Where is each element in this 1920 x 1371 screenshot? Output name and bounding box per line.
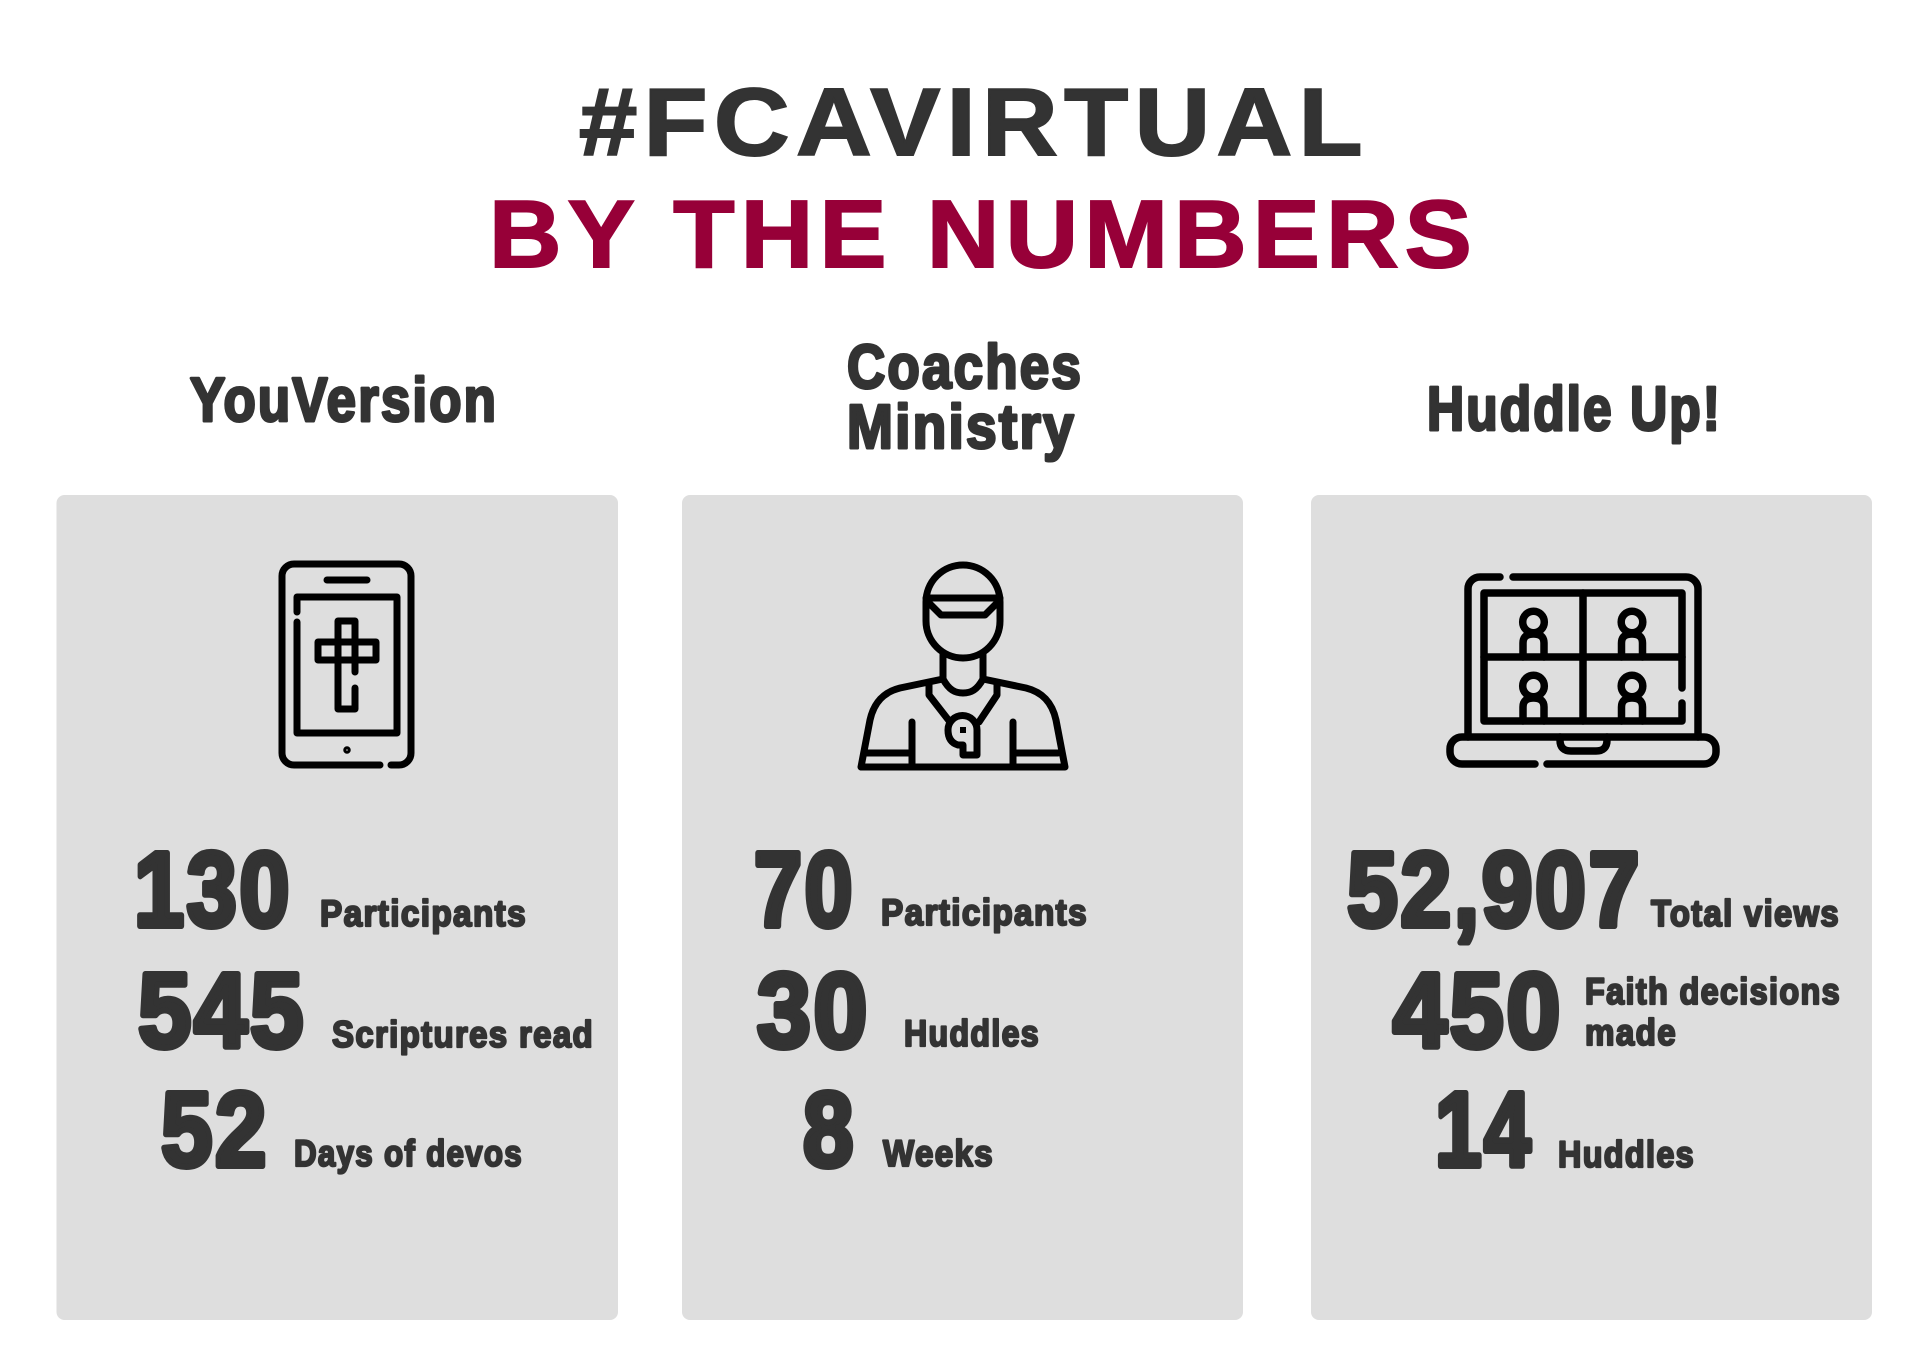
stat: 70 participants — [754, 831, 1088, 949]
stat: 52,907 total views: 52,907 — [1347, 831, 1642, 949]
stat: 30 huddles — [757, 952, 1040, 1070]
stat: 545 scriptures read: 545 — [138, 952, 306, 1070]
panel: Huddle Up — [1311, 375, 1872, 1320]
stat: 14 huddles: Huddles — [1558, 1134, 1695, 1175]
stat: 30 huddles: 30 — [757, 952, 870, 1070]
heading: Huddle Up!: Huddle Up! — [1427, 375, 1722, 444]
panel: Coaches Ministry — [682, 333, 1243, 1320]
stat: 545 scriptures read: Scriptures read — [332, 1014, 594, 1055]
icon: coach with whistle — [861, 565, 1065, 767]
stat: 30 huddles: Huddles — [904, 1013, 1040, 1054]
stat: 52,907 total views — [1347, 831, 1840, 949]
stat: 8 weeks: Weeks — [883, 1133, 994, 1174]
title — [489, 69, 1478, 288]
stat: 130 participants — [134, 831, 527, 949]
stat: 450 faith decisions made: made — [1585, 1012, 1677, 1053]
stat: 52 days of devos: Days of devos — [294, 1133, 523, 1174]
heading: Coaches Ministry: Coaches — [847, 333, 1083, 402]
card background — [56, 495, 618, 1320]
stat: 70 participants: Participants — [881, 892, 1088, 933]
stat: 14 huddles — [1435, 1071, 1695, 1189]
stat: 450 faith decisions made: Faith decisions — [1585, 971, 1841, 1012]
title line 2: BY THE NUMBERS — [489, 181, 1478, 288]
stat: 545 scriptures read — [138, 952, 594, 1070]
stat: 450 faith decisions made: 450 — [1393, 952, 1563, 1070]
icon: laptop video call — [1450, 577, 1716, 764]
stat: 70 participants: 70 — [754, 831, 855, 949]
heading: YouVersion: YouVersion — [190, 366, 498, 435]
panel: YouVersion — [56, 366, 618, 1320]
card background — [1311, 495, 1872, 1320]
stat: 130 participants: 130 — [134, 831, 292, 949]
icon: tablet with cross — [282, 564, 411, 765]
stat: 14 huddles: 14 — [1435, 1071, 1533, 1189]
stat: 8 weeks — [803, 1071, 994, 1189]
title line 1: #FCAVIRTUAL — [579, 69, 1369, 176]
stat: 52 days of devos: 52 — [161, 1071, 269, 1189]
stat: 52 days of devos — [161, 1071, 523, 1189]
stat: 130 participants: Participants — [320, 893, 527, 934]
card background — [682, 495, 1243, 1320]
stat: 8 weeks: 8 — [803, 1071, 856, 1189]
heading: Coaches Ministry: Ministry — [847, 393, 1076, 462]
stat: 450 faith decisions made — [1393, 952, 1841, 1070]
stat: 52,907 total views: Total views — [1651, 893, 1840, 934]
heading: Coaches Ministry — [847, 333, 1083, 462]
